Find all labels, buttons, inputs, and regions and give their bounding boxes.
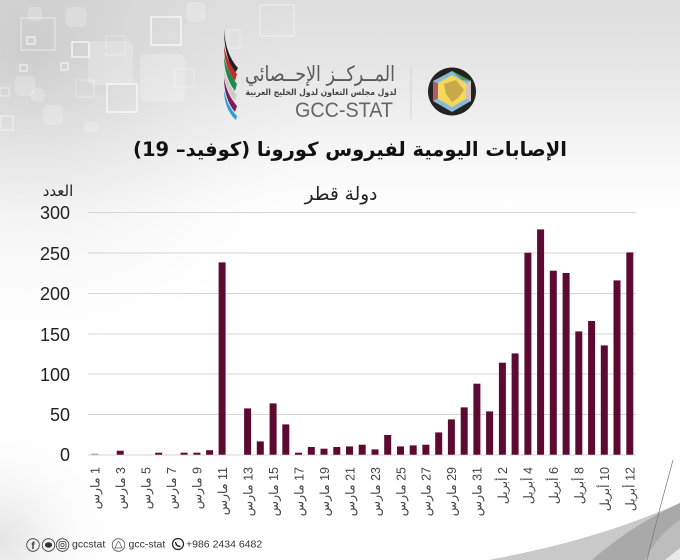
x axis labels [88, 467, 639, 516]
x axis labels: 19 مارس [318, 467, 333, 516]
icon: whatsapp [172, 538, 184, 550]
chart: daily cases [40, 182, 639, 516]
x axis labels: 2 أبريل [494, 467, 511, 504]
logo arabic subtitle: لدول مجلس التعاون لدول الخليج العربية [246, 88, 396, 98]
logo: GCC-STAT [224, 29, 396, 122]
subtitle: country: دولة قطر [304, 184, 377, 205]
icon: twitter [42, 539, 55, 551]
y axis labels: 200 [40, 284, 70, 304]
divider [410, 67, 412, 119]
x axis labels: 6 أبريل [545, 467, 562, 504]
icon: facebook: f [31, 541, 35, 552]
handle: gcc-stat: gcc-stat [128, 538, 165, 550]
y axis title: العدد [43, 182, 73, 200]
x axis labels: 5 مارس [140, 467, 154, 509]
x axis labels: 9 مارس [190, 467, 205, 509]
x axis labels: 10 أبريل [596, 467, 613, 511]
icon: facebook [27, 539, 39, 552]
logo latin name: GCC-STAT [295, 99, 393, 122]
x axis labels: 27 مارس [420, 467, 435, 516]
x axis labels: 29 مارس [445, 467, 460, 516]
decorative squares [0, 2, 294, 132]
x axis labels: 7 مارس [165, 467, 180, 509]
bottom right swoosh [488, 460, 680, 560]
x axis labels: 23 مارس [369, 467, 384, 516]
icon: GCC seal [428, 68, 476, 116]
x axis labels: 21 مارس [343, 467, 358, 516]
logo arabic name: المــركــز الإحــصائي [245, 62, 395, 86]
x axis labels: 3 مارس [114, 467, 129, 509]
y axis labels: 0 [60, 445, 70, 465]
y axis labels [40, 203, 70, 465]
title: الإصابات اليومية لفيروس كورونا (كوفيد– 19) [133, 138, 567, 161]
icon: snapchat [112, 539, 125, 551]
x axis labels: 8 أبريل [571, 467, 588, 504]
y axis labels: 300 [40, 203, 70, 223]
footer: social contacts [27, 538, 262, 552]
x axis labels: 13 مارس [241, 467, 256, 516]
x axis labels: 31 مارس [471, 467, 486, 516]
y axis labels: 100 [40, 365, 70, 385]
x axis labels: 25 مارس [394, 467, 409, 516]
x axis labels: 1 مارس [88, 467, 104, 509]
icon: instagram [56, 539, 69, 551]
y axis labels: 150 [40, 325, 70, 345]
icon: ribbon swooshes [224, 29, 238, 120]
handle: gccstat: gccstat [72, 538, 105, 550]
grid lines [88, 212, 636, 455]
phone number: +986 2434 6482 [186, 538, 262, 550]
x axis labels: 11 مارس [216, 467, 231, 515]
y axis labels: 250 [40, 244, 70, 264]
x axis labels: 4 أبريل [520, 467, 537, 504]
bars [91, 229, 633, 455]
y axis labels: 50 [50, 405, 70, 425]
x axis labels: 12 أبريل [622, 467, 639, 511]
x axis labels: 17 مارس [292, 467, 307, 516]
x axis labels: 15 مارس [267, 467, 282, 516]
